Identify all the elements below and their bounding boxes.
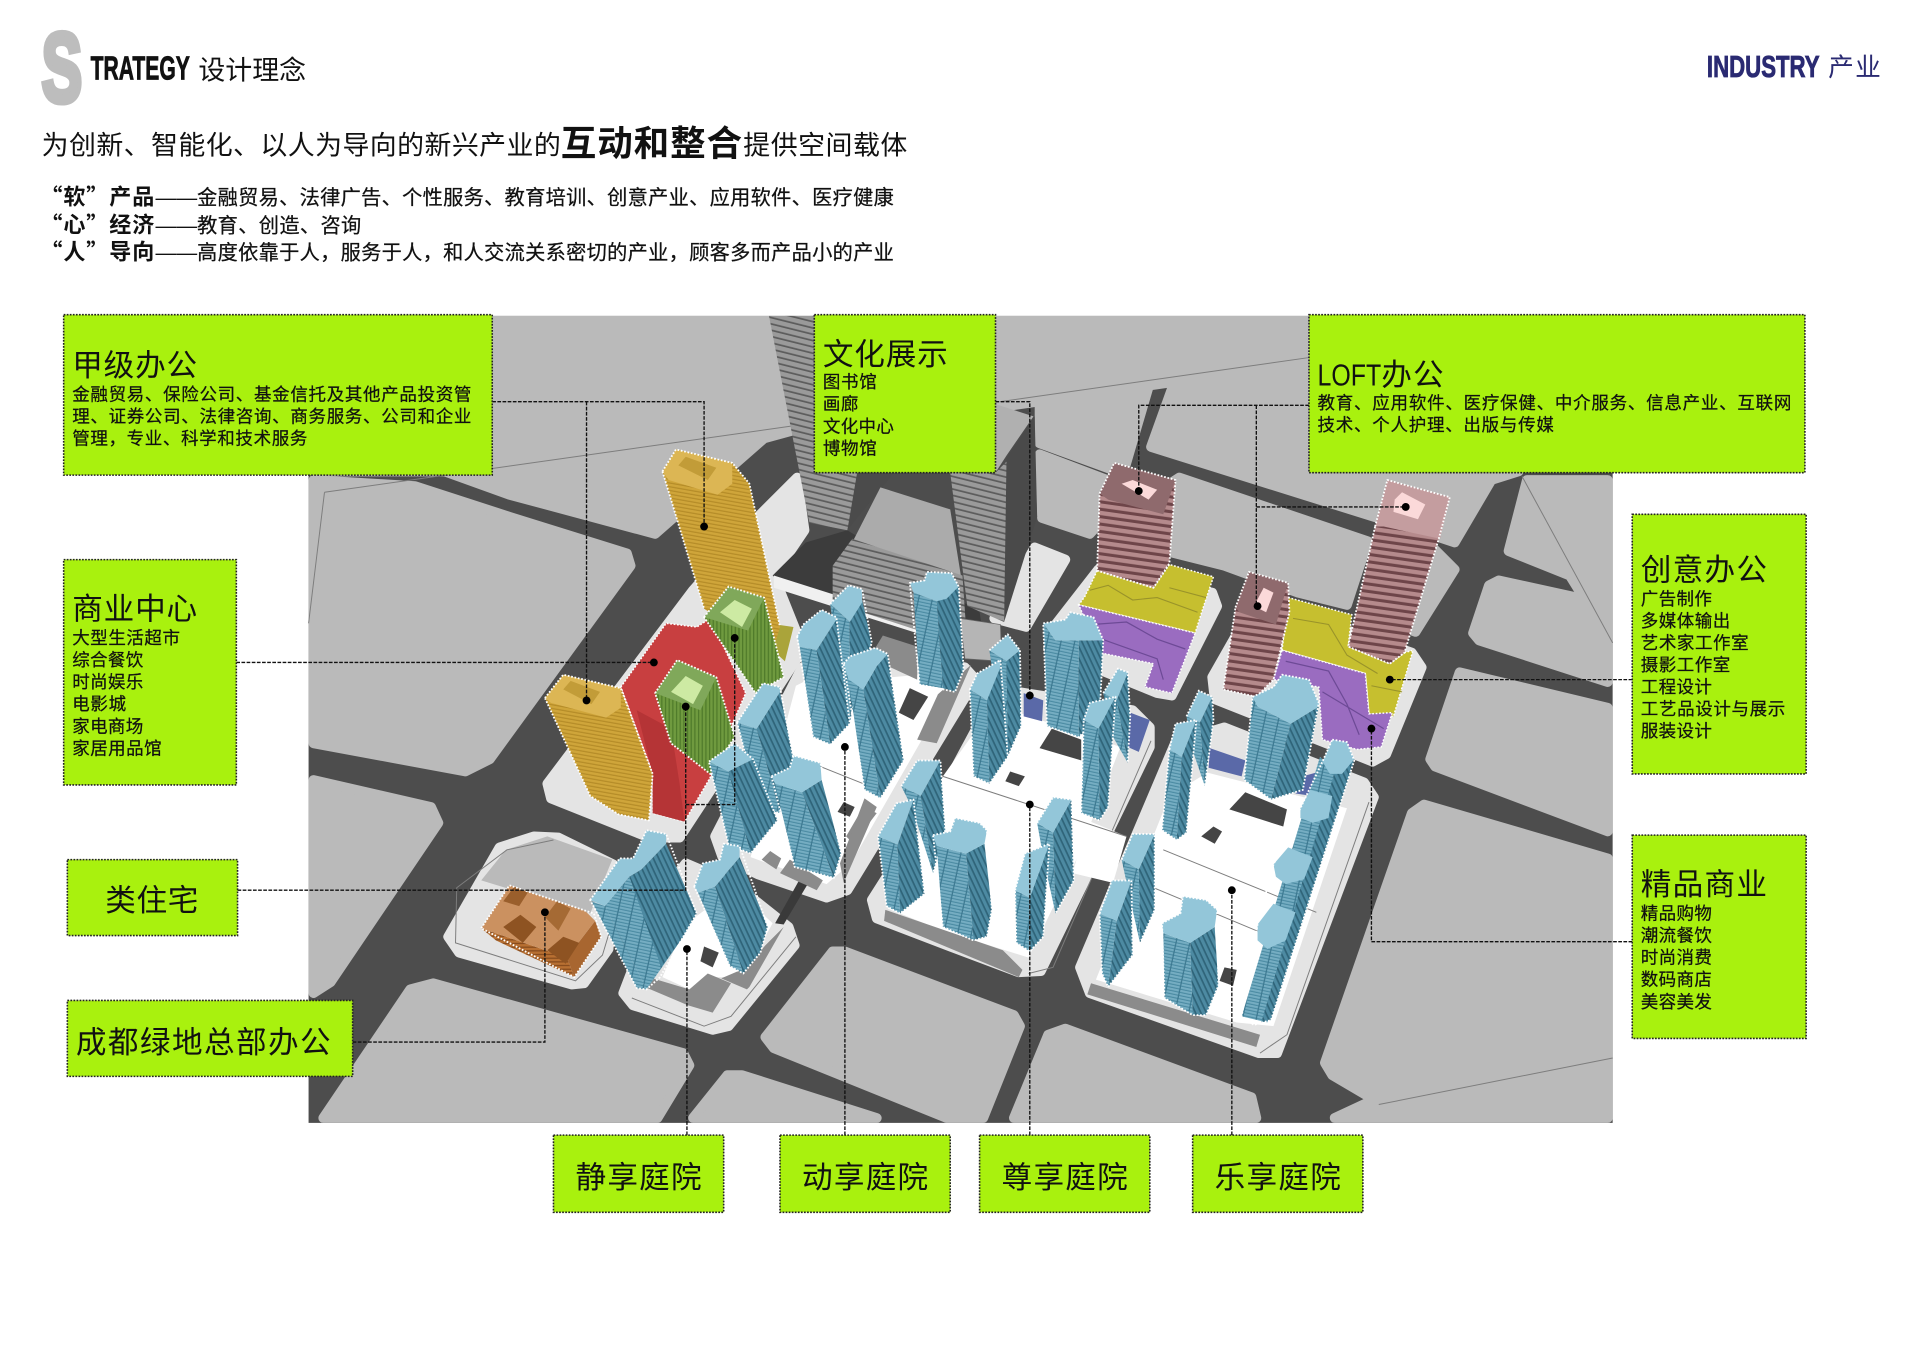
tower T2 back	[830, 585, 872, 724]
headline: 互动和整合	[561, 124, 742, 164]
text block: three orientations: “软”产品	[40, 179, 154, 211]
text block: three orientations: ——	[156, 216, 198, 238]
panel: boutique commerce: 时尚消费	[1641, 948, 1712, 968]
panel: joy courtyard	[1193, 1135, 1363, 1212]
plot boundary lines	[309, 358, 1613, 1105]
tower T10	[1043, 612, 1103, 737]
panel: active courtyard: 动享庭院	[802, 1161, 928, 1195]
panel: grade A office: 甲级办公	[72, 349, 197, 383]
panel: LOFT office: LOFT	[1318, 359, 1381, 393]
panel: Chengdu Greenland HQ office: 成都绿地总部办公	[76, 1026, 331, 1060]
navy retail strips	[1024, 693, 1320, 796]
panel: boutique commerce: 美容美发	[1641, 992, 1712, 1012]
tower T18 back	[1187, 691, 1213, 786]
tower T2 front	[797, 610, 850, 745]
tower: pink LOFT west	[1097, 463, 1176, 588]
panel: cultural exhibition: 博物馆	[823, 438, 877, 458]
panel: creative office: 服装设计	[1641, 721, 1712, 741]
panel: cultural exhibition: 文化展示	[823, 338, 948, 372]
podium: purple creative west	[1079, 605, 1195, 693]
tower T1	[910, 572, 964, 692]
text block: three orientations: 金融贸易、法律广告、个性服务、教育培训、创意产业、应用软件、医疗健康	[197, 186, 894, 209]
tower T4	[737, 683, 793, 813]
panel: creative office: 艺术家工作室	[1641, 633, 1749, 653]
tower T15 front	[1100, 880, 1133, 987]
panel: quiet courtyard: 静享庭院	[576, 1161, 702, 1195]
background high-rise complex	[769, 316, 1037, 661]
panel: commercial center: 大型生活超市	[72, 628, 180, 648]
panel: residential-like	[67, 860, 238, 936]
panel: commercial center: 家居用品馆	[72, 738, 162, 758]
panel: boutique commerce: 精品购物	[1641, 904, 1712, 924]
panel: LOFT office: 教育、应用软件、医疗保健、中介服务、信息产业、互联网	[1318, 393, 1791, 413]
panel: creative office: 创意办公	[1641, 553, 1767, 587]
text block: three orientations	[40, 179, 894, 267]
text block: three orientations: ——	[156, 243, 198, 265]
panel: grade A office: 管理，专业、科学和技术服务	[72, 426, 307, 451]
tower T13 back	[901, 760, 945, 873]
panel: cultural exhibition: 图书馆	[823, 372, 877, 392]
tower T11 back	[1103, 669, 1130, 763]
panel: cultural exhibition	[814, 315, 996, 473]
headline: 为创新、智能化、以人为导向的新兴产业的	[42, 130, 561, 160]
panel: commercial center: 时尚娱乐	[72, 672, 143, 692]
tower T12	[933, 818, 992, 940]
tower T9 back	[989, 634, 1021, 757]
orange headquarters building	[481, 885, 601, 977]
surrounding city blocks	[313, 321, 1608, 1118]
light plots	[448, 478, 1422, 1053]
tower T17 chain	[1242, 740, 1354, 1025]
panel: active courtyard	[780, 1135, 950, 1212]
text block: three orientations: “心”经济	[40, 208, 154, 240]
panel: quiet courtyard	[553, 1135, 724, 1212]
panel: premium courtyard	[980, 1135, 1150, 1212]
tower T13 front	[878, 800, 924, 913]
tower T15 back	[1122, 834, 1155, 943]
tower T6	[771, 756, 841, 878]
panel: creative office: 摄影工作室	[1641, 655, 1730, 675]
tower: green south	[655, 660, 735, 774]
tower T14 front	[1015, 844, 1049, 951]
leader dots	[541, 487, 1410, 953]
panel: grade A office: 金融贸易、保险公司、基金信托及其他产品投资管	[72, 384, 471, 404]
panel: commercial center: 家电商场	[72, 716, 143, 736]
tower T19	[1244, 675, 1319, 800]
panel: commercial center	[64, 560, 236, 785]
tower T14 back	[1037, 797, 1074, 913]
text block: three orientations: ——	[156, 187, 198, 209]
heading: strategy	[42, 14, 306, 123]
site map	[236, 316, 1632, 1135]
panel: Chengdu Greenland HQ office	[67, 1000, 353, 1076]
podium: olive LOFT west	[1079, 565, 1213, 633]
panel: LOFT office: 办公	[1381, 359, 1444, 393]
panel: cultural exhibition: 画廊	[823, 394, 858, 414]
text block: three orientations: 高度依靠于人，服务于人，和人交流关系密切的产业，顾客多而产品小的产业	[197, 237, 894, 266]
headline	[42, 124, 907, 164]
courtyard edges, pits and service blocks	[648, 636, 1316, 1047]
blue residential towers	[590, 572, 1354, 1025]
heading: strategy: TRATEGY	[91, 51, 190, 88]
heading: industry: INDUSTRY	[1707, 50, 1820, 84]
panel: premium courtyard: 尊享庭院	[1002, 1161, 1128, 1195]
panel: creative office	[1632, 514, 1806, 774]
podium: red commercial	[621, 618, 746, 822]
panel: commercial center: 综合餐饮	[72, 650, 144, 670]
tower T18 front	[1162, 720, 1196, 840]
panel: commercial center: 电影城	[72, 694, 126, 714]
panel: grade A office: 理、证券公司、法律咨询、商务服务、公司和企业	[72, 406, 471, 426]
heading: industry: 产业	[1828, 53, 1881, 82]
headline: 提供空间载体	[743, 130, 907, 160]
panel: grade A office	[64, 315, 492, 475]
heading: strategy: S	[42, 14, 82, 123]
tower: yellow office south	[545, 675, 653, 820]
podium: olive LOFT east	[1282, 598, 1413, 716]
tower T7	[590, 830, 697, 989]
panel: commercial center: 商业中心	[72, 593, 197, 627]
panel: boutique commerce: 潮流餐饮	[1641, 926, 1712, 946]
tower: pink LOFT middle	[1223, 572, 1289, 697]
panel: creative office: 多媒体输出	[1641, 611, 1730, 631]
podium: small olive	[771, 625, 793, 661]
panel: joy courtyard: 乐享庭院	[1215, 1161, 1341, 1195]
text block: three orientations: 教育、创造、咨询	[197, 215, 361, 238]
panel: creative office: 工程设计	[1641, 677, 1712, 697]
orange plot lawn	[481, 836, 612, 913]
panel: LOFT office: 技术、个人护理、出版与传媒	[1318, 415, 1554, 435]
text block: three orientations: “人”导向	[40, 235, 154, 267]
tower: pink LOFT east	[1348, 480, 1450, 664]
panel: cultural exhibition: 文化中心	[823, 416, 894, 436]
tower: green north	[704, 587, 784, 693]
podium: purple boutique east	[1273, 650, 1392, 749]
heading: strategy: 设计理念	[198, 56, 306, 86]
tower T3	[844, 648, 904, 798]
panel: creative office: 工艺品设计与展示	[1641, 699, 1785, 719]
panel: boutique commerce: 数码商店	[1641, 970, 1712, 990]
courtyards	[662, 661, 1347, 1026]
panel: creative office: 广告制作	[1641, 589, 1712, 609]
panel: residential-like: 类住宅	[105, 884, 198, 918]
tower T16	[1162, 896, 1218, 1015]
tower T9 front	[970, 660, 1008, 784]
tower T5	[709, 743, 778, 853]
leader lines	[236, 402, 1632, 1135]
tower T8	[694, 844, 768, 973]
panel: boutique commerce: 精品商业	[1641, 868, 1767, 902]
panel: LOFT office	[1309, 315, 1805, 473]
tower: yellow office north	[662, 449, 780, 655]
panel: boutique commerce	[1632, 835, 1806, 1038]
tower T11 front	[1081, 697, 1116, 820]
